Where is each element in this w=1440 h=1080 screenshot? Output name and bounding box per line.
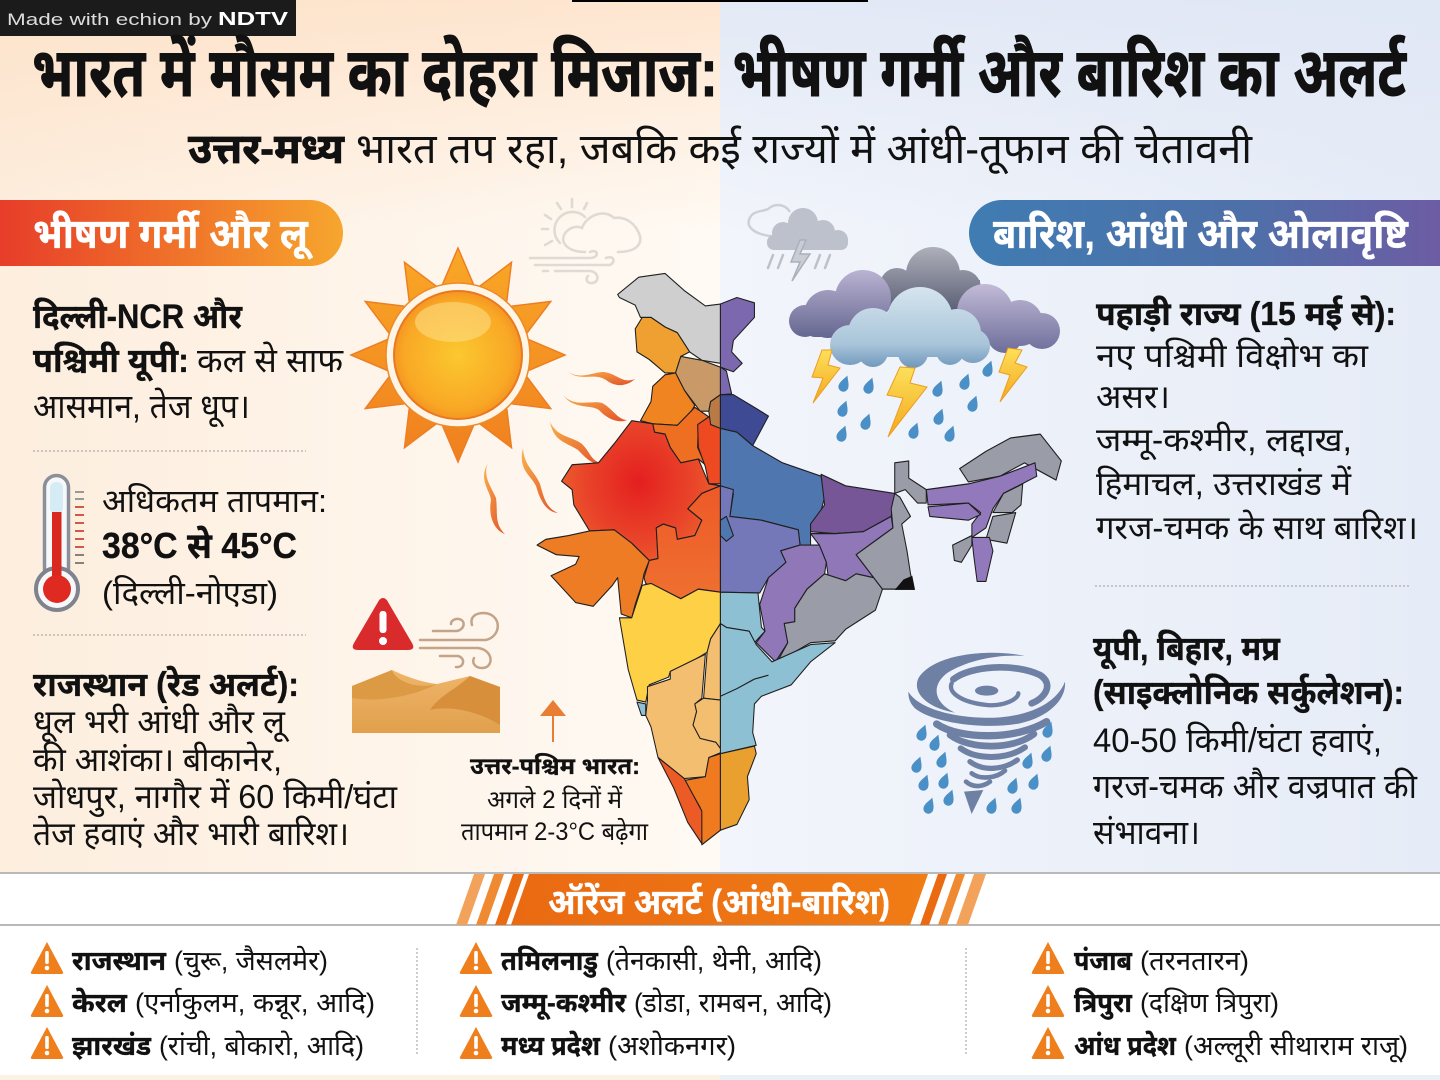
orange alert ribbon: ऑरेंज अलर्ट (आंधी-बारिश) bbox=[548, 882, 890, 922]
alert list: column 1: झारखंड bbox=[72, 1031, 152, 1061]
icon: red warning triangle bbox=[353, 598, 413, 650]
text block: hill states: असर। bbox=[1096, 378, 1170, 415]
text block: UP, Bihar, MP bbox=[1093, 630, 1418, 852]
alert list: column 3: पंजाब bbox=[1074, 946, 1133, 976]
text block: hill states: जम्मू-कश्मीर, लद्दाख, bbox=[1096, 421, 1352, 460]
watermark badge bbox=[0, 0, 296, 36]
text block: UP, Bihar, MP: 40-50 किमी/घंटा हवाएं, bbox=[1093, 722, 1382, 760]
orange alert ribbon bbox=[456, 874, 986, 925]
alert list: column 1: (रांची, बोकारो, आदि) bbox=[159, 1031, 364, 1061]
icon: cyclone bbox=[908, 653, 1065, 815]
text block: maximum temperature: अधिकतम तापमान: bbox=[102, 483, 327, 519]
text block: Rajasthan red alert: जोधपुर, नागौर में 60 किमी/घंटा bbox=[33, 778, 398, 817]
icon: sun with wind outline bbox=[530, 199, 640, 283]
alert list: column 1: (एर्नाकुलम, कन्नूर, आदि) bbox=[135, 987, 375, 1020]
alert list: column 1: (चुरू, जैसलमेर) bbox=[174, 945, 328, 978]
alert list: column 2: तमिलनाडु bbox=[501, 946, 599, 977]
text block: Rajasthan red alert bbox=[33, 665, 398, 852]
alert list: column 3: त्रिपुरा bbox=[1074, 988, 1133, 1019]
alert list: column 3: (तरनतारन) bbox=[1140, 946, 1249, 976]
alert list: column 3: (अल्लूरी सीथाराम राजू) bbox=[1184, 1031, 1408, 1063]
callout: north-west India forecast bbox=[461, 753, 648, 846]
alert list: column 2: (तेनकासी, थेनी, आदि) bbox=[606, 945, 822, 976]
text block: Rajasthan red alert: राजस्थान (रेड अलर्ट): bbox=[33, 665, 299, 704]
icon: thermometer bbox=[36, 476, 84, 610]
right heading pill: बारिश, आंधी और ओलावृष्टि bbox=[993, 210, 1409, 260]
text block: Delhi-NCR: पश्चिमी यूपी: bbox=[33, 342, 189, 382]
map of India bbox=[537, 273, 1061, 845]
text block: hill states: पहाड़ी राज्य (15 मई से): bbox=[1096, 294, 1396, 332]
alert list: column 2: (अशोकनगर) bbox=[608, 1031, 736, 1061]
text block: hill states: हिमाचल, उत्तराखंड में bbox=[1096, 465, 1352, 502]
arrow: rising temperature bbox=[540, 700, 566, 742]
text block: maximum temperature: (दिल्ली-नोएडा) bbox=[102, 575, 278, 611]
left heading pill bbox=[0, 200, 343, 266]
text block: hill states bbox=[1096, 294, 1418, 546]
text block: maximum temperature bbox=[102, 483, 327, 611]
text block: Delhi-NCR: दिल्ली-NCR और bbox=[33, 298, 243, 336]
icon: sand dunes bbox=[352, 670, 500, 733]
text block: maximum temperature: 38°C से 45°C bbox=[102, 524, 297, 566]
alert list: column 3: (दक्षिण त्रिपुरा) bbox=[1140, 988, 1279, 1020]
subtitle: उत्तर-मध्य bbox=[188, 125, 345, 172]
text block: UP, Bihar, MP: (साइक्लोनिक सर्कुलेशन): bbox=[1093, 673, 1404, 714]
dotted dividers bbox=[33, 451, 1410, 1055]
alert list: column 1 bbox=[31, 942, 375, 1061]
text block: Delhi-NCR: आसमान, तेज धूप। bbox=[33, 387, 250, 427]
text block: UP, Bihar, MP: यूपी, बिहार, मप्र bbox=[1093, 630, 1281, 670]
icon: sun bbox=[351, 248, 565, 462]
text block: UP, Bihar, MP: संभावना। bbox=[1093, 814, 1200, 852]
watermark badge: Made with echion by bbox=[7, 10, 213, 29]
subtitle: भारत तप रहा, जबकि कई राज्यों में आंधी-तूफान की चेतावनी bbox=[356, 125, 1253, 174]
alert list: column 2: जम्मू-कश्मीर bbox=[501, 988, 627, 1020]
alert list: column 1: केरल bbox=[72, 987, 128, 1018]
icon: storm cloud with lightning and rain bbox=[789, 247, 1060, 443]
text block: Rajasthan red alert: की आशंका। बीकानेर, bbox=[33, 740, 282, 778]
callout: north-west India forecast: तापमान 2-3°C बढ़ेगा bbox=[461, 816, 648, 846]
icon: rain cloud grey bbox=[749, 205, 848, 281]
alert list: column 2: मध्य प्रदेश bbox=[501, 1030, 600, 1061]
icon: wind bbox=[420, 613, 498, 668]
right heading pill bbox=[969, 200, 1440, 266]
alert list: column 2: (डोडा, रामबन, आदि) bbox=[634, 988, 832, 1018]
heat waves bbox=[484, 372, 635, 534]
text block: hill states: नए पश्चिमी विक्षोभ का bbox=[1096, 337, 1370, 374]
text block: Delhi-NCR bbox=[33, 298, 344, 427]
alert list: column 3 bbox=[1032, 942, 1408, 1063]
text block: UP, Bihar, MP: गरज-चमक और वज्रपात की bbox=[1093, 767, 1418, 806]
text block: Delhi-NCR: कल से साफ bbox=[197, 341, 344, 380]
alert list: column 1: राजस्थान bbox=[72, 946, 167, 976]
callout: north-west India forecast: अगले 2 दिनों में bbox=[487, 784, 623, 814]
text block: hill states: गरज-चमक के साथ बारिश। bbox=[1096, 508, 1418, 546]
callout: north-west India forecast: उत्तर-पश्चिम भारत: bbox=[470, 753, 640, 779]
alert list: column 3: आंध प्रदेश bbox=[1074, 1030, 1176, 1061]
alert list: column 2 bbox=[460, 942, 832, 1061]
text block: Rajasthan red alert: तेज हवाएं और भारी बारिश। bbox=[33, 814, 349, 852]
left heading pill: भीषण गर्मी और लू bbox=[33, 210, 313, 260]
watermark badge: NDTV bbox=[218, 9, 288, 29]
text block: Rajasthan red alert: धूल भरी आंधी और लू bbox=[33, 703, 290, 742]
band rules bbox=[0, 872, 1440, 926]
